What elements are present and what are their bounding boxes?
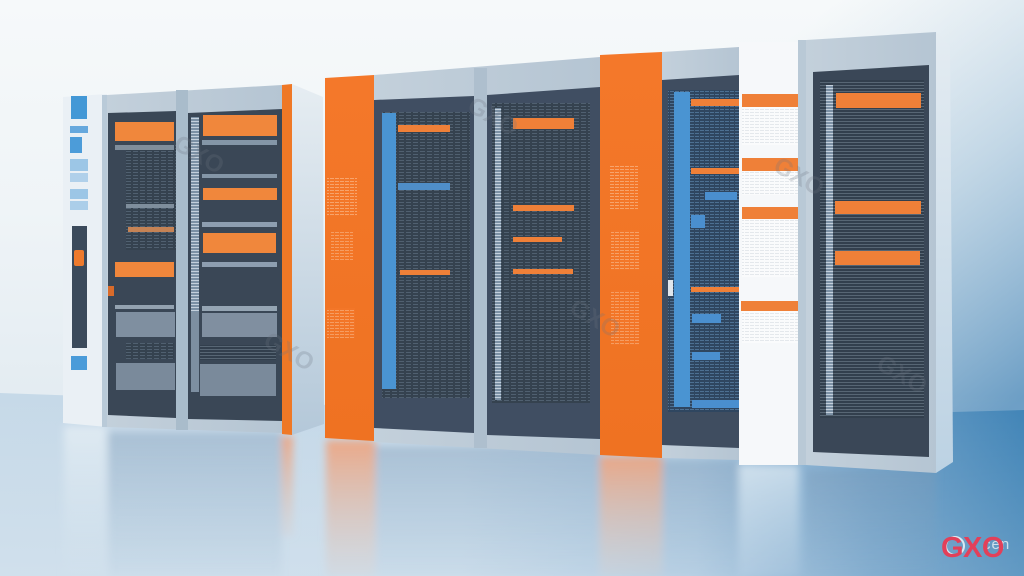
right server rack — [662, 32, 953, 473]
left server rack — [63, 84, 324, 435]
watermarks: GXO — [872, 350, 932, 400]
left rack side wall — [292, 84, 324, 435]
watermarks: GXO — [169, 130, 229, 180]
center rack left orange panel — [325, 75, 374, 441]
left rack white control panel — [63, 94, 108, 427]
center rack screen one — [374, 96, 474, 433]
right rack blue screen — [662, 75, 739, 448]
logo: ecen: cen — [983, 536, 1010, 553]
background wall — [0, 0, 1024, 420]
left rack gray frame — [107, 85, 282, 433]
center rack gray frame — [374, 57, 600, 455]
left rack screen two — [188, 109, 282, 421]
watermarks: GXO — [259, 327, 319, 377]
right rack side wall — [936, 32, 953, 473]
watermarks — [169, 92, 932, 400]
right rack gray frame — [662, 47, 739, 460]
center server rack — [325, 52, 662, 458]
floor with reflections — [0, 393, 1024, 576]
right rack white data panel — [739, 42, 798, 465]
logo: ecen — [946, 536, 1010, 555]
right rack main frame — [806, 32, 936, 473]
watermarks: GXO — [565, 294, 625, 344]
center rack screen two — [487, 87, 600, 439]
center rack right orange panel — [600, 52, 662, 458]
watermarks: GXO — [463, 92, 523, 142]
right rack main screen — [813, 65, 929, 457]
watermarks: GXO — [769, 152, 829, 202]
logo: GXO red watermark: GXO — [941, 532, 1004, 564]
left rack screen one — [108, 111, 176, 418]
left rack orange strip — [282, 84, 292, 435]
right rack gray strip — [798, 40, 806, 465]
